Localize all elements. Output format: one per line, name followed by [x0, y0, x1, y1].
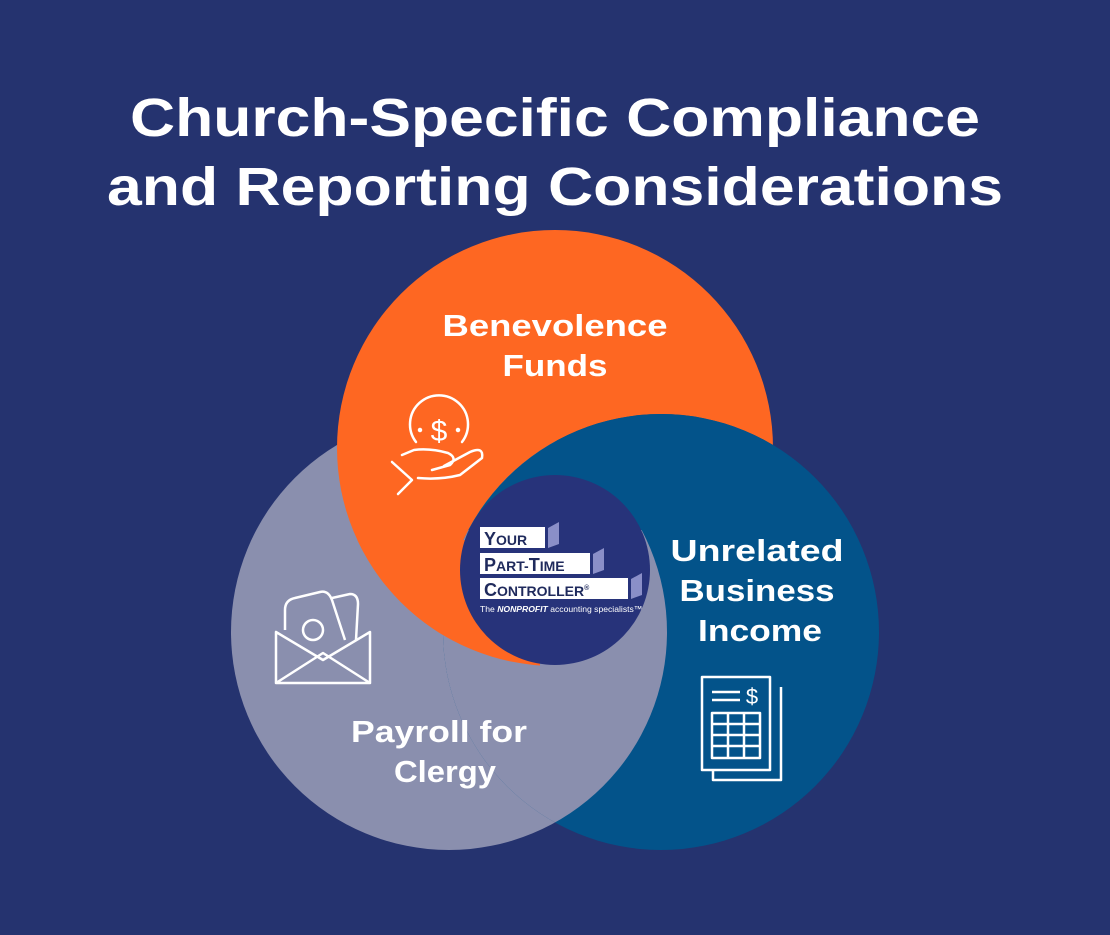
title — [107, 88, 1003, 217]
label: unrelated business income: Business — [680, 573, 834, 608]
title: Church-Specific Compliance — [130, 88, 980, 148]
icon: hand with coin — [392, 395, 482, 494]
icon: envelope with money — [276, 592, 370, 683]
title: and Reporting Considerations — [107, 157, 1003, 217]
circle: unrelated business income — [443, 414, 879, 850]
label: unrelated business income: Unrelated — [670, 533, 844, 568]
circle: payroll for clergy — [231, 414, 667, 850]
label: payroll for clergy: Clergy — [394, 754, 497, 789]
logo: ® — [584, 584, 590, 592]
label: payroll for clergy — [351, 714, 527, 789]
label: unrelated business income — [670, 533, 844, 648]
label: payroll for clergy: Payroll for — [351, 714, 527, 749]
icon: document with dollar: $ — [746, 684, 758, 709]
orange lower-left of triple region — [357, 540, 540, 666]
logo: CONTROLLER — [484, 580, 584, 600]
venn diagram — [231, 230, 879, 850]
logo: The NONPROFIT accounting specialists™ — [480, 604, 642, 614]
logo: YOUR — [484, 529, 527, 549]
circle: benevolence funds — [337, 230, 773, 666]
icon: hand with coin: $ — [431, 415, 448, 448]
blue upper part of triple region — [468, 414, 854, 530]
logo: PART-TIME — [484, 555, 565, 575]
label: unrelated business income: Income — [698, 613, 822, 648]
icon: document with dollar — [702, 677, 781, 780]
label: benevolence funds: Funds — [502, 348, 608, 383]
center logo circle — [460, 475, 650, 665]
label: benevolence funds: Benevolence — [442, 308, 668, 343]
grey overlap over blue — [443, 442, 667, 822]
label: benevolence funds — [442, 308, 668, 383]
logo — [480, 522, 642, 614]
